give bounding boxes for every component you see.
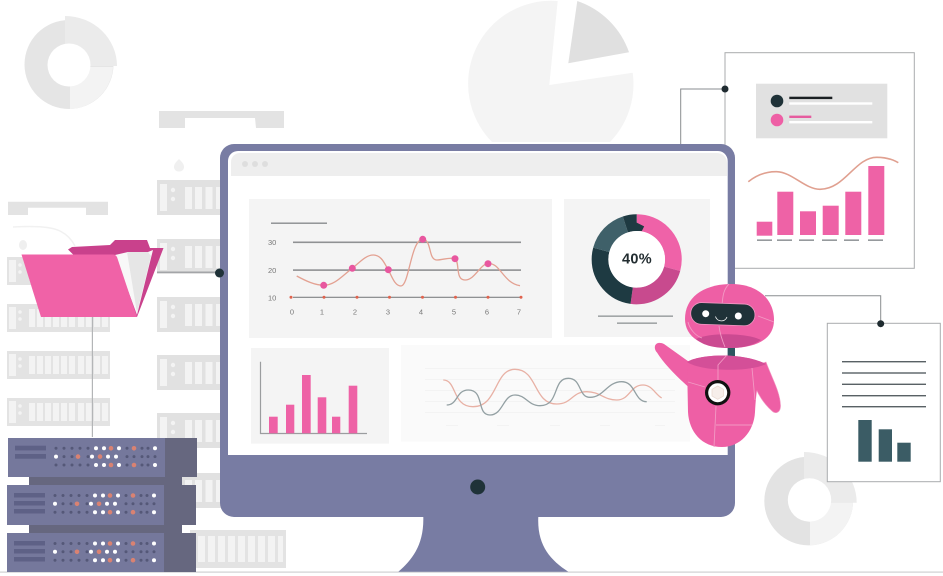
connector dot: folder	[215, 268, 224, 278]
grid lines	[293, 242, 521, 298]
trend curve	[748, 157, 898, 189]
line curve	[297, 239, 520, 286]
x axis labels: 7	[517, 308, 521, 316]
connector: document one to monitor	[681, 89, 725, 144]
background: gray header bar left	[8, 202, 108, 215]
panel: line chart	[249, 199, 552, 338]
background: centre server rack column	[157, 180, 286, 568]
connector dot: document two	[877, 320, 884, 327]
x axis labels	[290, 308, 521, 316]
connector: folder to servers	[92, 317, 93, 437]
server one	[8, 438, 197, 477]
bar chart	[757, 166, 884, 236]
bars	[858, 420, 911, 462]
folder front	[22, 254, 137, 317]
legend box	[756, 84, 887, 138]
data points	[320, 236, 492, 289]
robot head	[685, 284, 774, 348]
connector lower	[29, 524, 182, 534]
bars	[269, 375, 357, 433]
robot eye right	[735, 312, 742, 320]
ground line	[0, 572, 943, 573]
monitor	[220, 144, 735, 572]
x axis labels: 1	[320, 308, 324, 316]
bar baseline dashes	[757, 240, 883, 241]
document one: report with legend and bar chart	[725, 53, 914, 268]
panel: bar chart	[251, 348, 389, 444]
donut value: 40%	[622, 252, 652, 268]
panel: donut chart	[564, 199, 710, 337]
background: gray donut top left	[24, 16, 117, 109]
panel: wave chart	[401, 345, 690, 442]
background: left server rack column	[7, 257, 110, 426]
background: small drop	[174, 159, 184, 172]
server three	[7, 533, 196, 572]
folder page shade	[127, 252, 151, 313]
connector: robot to document two	[765, 296, 881, 323]
browser top bar	[231, 153, 727, 176]
monitor webcam dot	[470, 480, 485, 494]
donut caption lines	[598, 316, 673, 324]
x axis labels: 0	[290, 308, 294, 316]
robot visor	[690, 302, 755, 326]
monitor stand	[398, 517, 568, 572]
robot right arm	[750, 362, 781, 413]
wave grid	[425, 368, 675, 426]
faint cable above folder	[13, 226, 75, 246]
server connectors	[29, 476, 182, 486]
donut	[600, 223, 673, 296]
monitor body	[220, 144, 735, 517]
x axis labels: 5	[452, 308, 456, 316]
server stack	[7, 438, 197, 572]
robot	[655, 284, 781, 447]
y axis labels	[268, 238, 276, 302]
background: large gray pie chart	[468, 1, 633, 142]
robot head seams	[688, 284, 774, 347]
robot left arm	[655, 343, 692, 390]
x axis labels: 4	[419, 308, 423, 316]
x axis labels: 6	[485, 308, 489, 316]
donut centre fill	[608, 231, 665, 288]
y axis labels: 20	[268, 266, 276, 275]
robot neck	[728, 346, 735, 358]
robot body top shade	[687, 356, 766, 370]
y axis labels: 10	[268, 294, 276, 302]
x axis labels: 2	[353, 308, 357, 316]
folder back	[68, 240, 164, 317]
robot body seams	[688, 355, 755, 447]
y axis labels: 30	[268, 238, 276, 247]
text lines	[842, 361, 926, 407]
server two	[7, 485, 196, 525]
gray wave	[447, 378, 647, 415]
robot chest button	[705, 380, 730, 405]
robot body	[687, 356, 766, 447]
robot chin shade	[696, 334, 761, 348]
document two: report with text lines and bars	[827, 323, 940, 482]
faint blob near folder	[19, 240, 27, 250]
folder pages	[115, 250, 153, 315]
x axis labels: 3	[386, 308, 390, 316]
robot eyes	[702, 310, 709, 317]
axes	[260, 362, 367, 434]
monitor screen	[228, 151, 728, 455]
robot smile	[716, 316, 727, 321]
background: gray header bar top	[159, 111, 284, 128]
axis ticks	[290, 296, 522, 299]
connector dot: document one	[722, 86, 728, 92]
pink wave	[443, 369, 662, 407]
background: gray donut bottom right	[764, 452, 857, 545]
connector: folder to monitor	[157, 272, 219, 273]
folder icon	[22, 240, 164, 317]
